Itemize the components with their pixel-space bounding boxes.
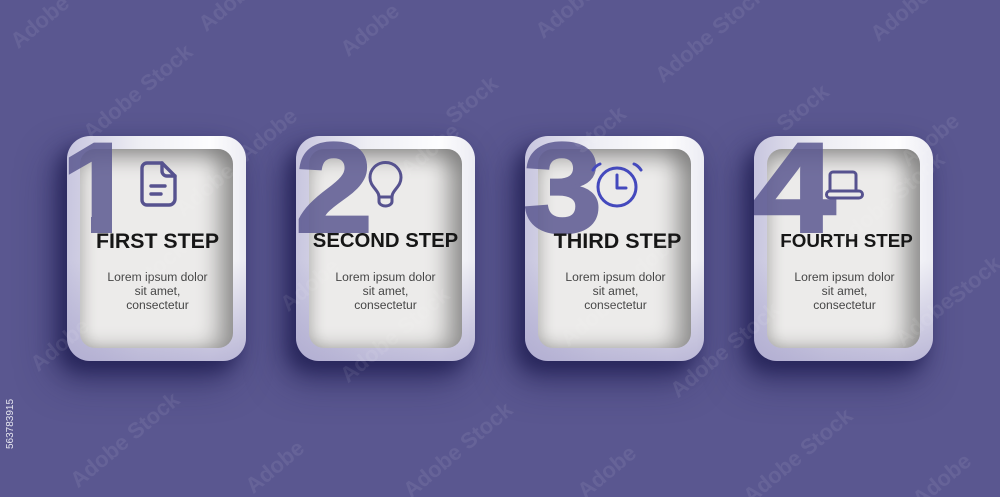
description: consectetur: [354, 298, 417, 312]
description: consectetur: [126, 298, 189, 312]
watermark layer: Stock: [772, 79, 834, 136]
watermark layer: Stock: [569, 101, 631, 158]
inner tray: [309, 149, 462, 348]
numeral 4: 4: [754, 117, 835, 259]
icon: light bulb: [368, 161, 402, 208]
description: consectetur: [813, 298, 876, 312]
inner tray: [538, 149, 691, 348]
watermark layer: Adobe Stock: [830, 147, 949, 252]
watermark layer: Stock: [129, 236, 191, 293]
icon: alarm clock: [592, 162, 643, 208]
icon: document: [140, 161, 177, 207]
inner tray: [767, 149, 920, 348]
numeral 2: 2: [296, 118, 372, 259]
description: [335, 270, 436, 312]
watermark layer: Adobe Stock: [665, 297, 784, 402]
description: [107, 270, 208, 312]
title: FOURTH STEP: [780, 230, 913, 251]
watermark layer: Adobe: [240, 435, 309, 497]
stock image id: 563783915: [5, 399, 16, 449]
description: sit amet,: [363, 284, 408, 298]
icon: laptop: [825, 170, 864, 200]
watermark layer: Adobe Stock: [78, 39, 197, 144]
description: consectetur: [584, 298, 647, 312]
numeral 3: 3: [524, 118, 602, 259]
watermark layer: Adobe Stock: [65, 387, 184, 492]
title: SECOND STEP: [313, 230, 458, 252]
watermark layer: Adobe Stock: [335, 282, 454, 387]
description: sit amet,: [593, 284, 638, 298]
watermark layer: Adobe: [170, 158, 239, 221]
description: Lorem ipsum dolor: [794, 270, 895, 284]
watermark layer: Adobe: [890, 288, 959, 351]
description: sit amet,: [135, 284, 180, 298]
panel: second step card: [296, 136, 475, 361]
watermark layer: Adobe: [395, 118, 464, 181]
panel: fourth step card: [754, 136, 933, 361]
inner tray: [80, 149, 233, 348]
description: Lorem ipsum dolor: [335, 270, 436, 284]
panel: first step card: [67, 136, 246, 361]
watermark layer: Adobe: [25, 313, 94, 376]
watermark layer: Adobe: [615, 228, 684, 291]
numeral 1: 1: [61, 118, 138, 259]
description: sit amet,: [822, 284, 867, 298]
watermark layer: Adobe: [555, 288, 624, 351]
watermark layer: Adobe: [275, 253, 344, 316]
watermark layer: Adobe: [233, 103, 302, 166]
description: Lorem ipsum dolor: [107, 270, 208, 284]
description: [565, 270, 666, 312]
watermark layer: Stock: [441, 71, 503, 128]
title: FIRST STEP: [96, 229, 219, 253]
description: [794, 270, 895, 312]
watermark layer: Adobe: [895, 108, 964, 171]
description: Lorem ipsum dolor: [565, 270, 666, 284]
title: THIRD STEP: [554, 229, 681, 253]
panel: third step card: [525, 136, 704, 361]
